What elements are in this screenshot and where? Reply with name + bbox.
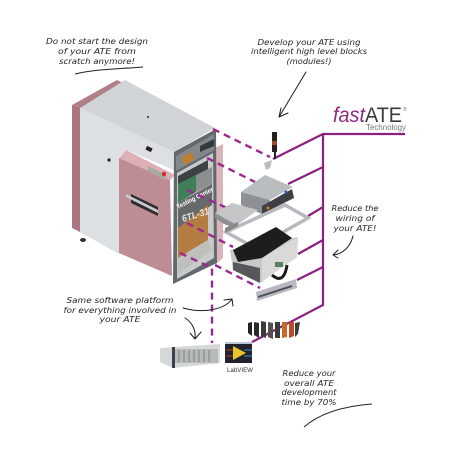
callout: reduce wiring: Reduce the: [332, 204, 379, 213]
callout: intelligent modules: Develop your ATE using: [258, 38, 360, 47]
callout: same software platform: for everything involved in: [64, 306, 176, 315]
arrow: to signal tower: [279, 72, 306, 117]
arrow: to wiring: [333, 236, 353, 258]
callout: reduce development time: development: [282, 388, 337, 397]
callout: reduce development time: [282, 369, 372, 427]
logo: fastATE Technology: [333, 104, 407, 132]
callout: do not start from scratch: [46, 37, 148, 74]
machine cabinet: [72, 80, 223, 284]
dashed connectors: [180, 129, 270, 343]
module: instrument cards: [248, 321, 300, 339]
callout: reduce development time: overall ATE: [284, 379, 335, 388]
callout: intelligent modules: (modules!): [286, 57, 332, 66]
LabVIEW label: LabVIEW: [227, 368, 253, 374]
logo: fastATE Technology: ATE: [365, 104, 402, 127]
icon: LabVIEW: [225, 342, 252, 363]
callout: intelligent modules: intelligent high level blocks: [251, 47, 367, 56]
logo: fastATE Technology: Technology: [366, 123, 406, 132]
callout: reduce development time: Reduce your: [282, 369, 336, 378]
module: signal tower: [264, 132, 277, 170]
arrow: to software tools: [183, 299, 233, 311]
callout: reduce wiring: [332, 204, 379, 233]
cabinet label: Testing Center: Testing Center: [176, 186, 215, 211]
callout: same software platform: [64, 296, 176, 324]
module: drawer and frame: [215, 203, 308, 248]
callout: same software platform: Same software platform: [66, 296, 174, 305]
callout: do not start from scratch: scratch anymore!: [59, 57, 135, 66]
module: PXI chassis: [160, 344, 220, 368]
module: connector bar: [256, 279, 297, 301]
callout: reduce wiring: wiring of: [336, 214, 376, 223]
arrow: to PXI chassis: [185, 318, 201, 339]
module: power unit: [241, 175, 294, 214]
callout: do not start from scratch: of your ATE from: [58, 47, 136, 56]
callout: reduce development time: time by 70%: [282, 398, 336, 407]
callout: intelligent modules: [251, 38, 367, 66]
callout: same software platform: your ATE: [98, 315, 142, 324]
cabinet label: 6TL-31: 6TL-31: [181, 206, 211, 225]
solid wiring: [252, 134, 405, 342]
logo: fastATE Technology: fast: [333, 104, 366, 127]
callout: do not start from scratch: Do not start the design: [46, 37, 148, 46]
logo: fastATE Technology: ®: [403, 106, 407, 113]
module: test fixture: [230, 227, 298, 283]
callout: reduce wiring: your ATE!: [332, 224, 376, 233]
